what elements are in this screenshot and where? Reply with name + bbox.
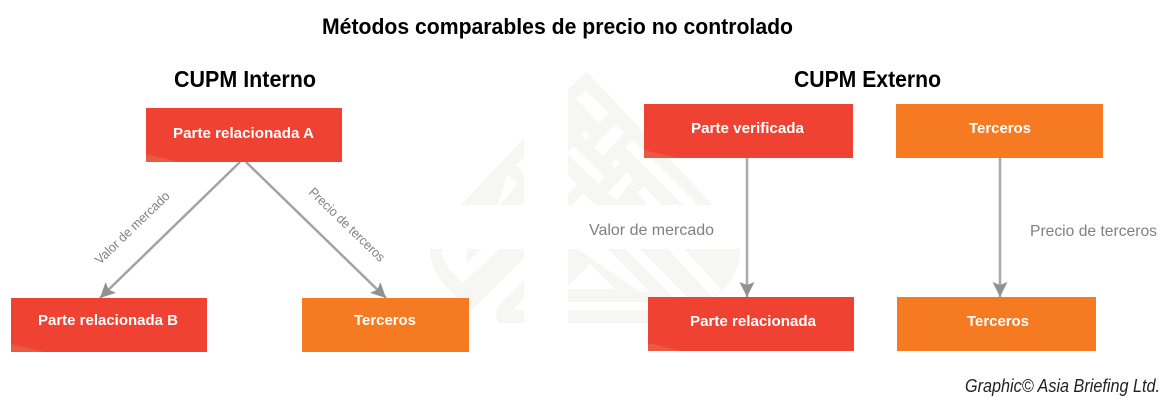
box: Parte relacionada <box>648 297 854 351</box>
panel: CUPM Interno <box>11 66 469 352</box>
box: Terceros top <box>896 104 1103 158</box>
box: Terceros bottom: Terceros <box>967 313 1029 330</box>
box: Terceros <box>302 298 469 352</box>
box: Parte relacionada B <box>11 298 207 352</box>
credit: Graphic© Asia Briefing Ltd. <box>965 376 1160 396</box>
box: Terceros: Terceros <box>354 312 416 329</box>
label: Valor de mercado: Valor de mercado <box>92 188 173 267</box>
arrow: to Parte relacionada B <box>100 162 240 298</box>
box: Terceros top: Terceros <box>969 120 1031 137</box>
box: Parte relacionada A <box>146 108 342 162</box>
heading: CUPM Interno: CUPM Interno <box>174 66 316 92</box>
box: Parte verificada: Parte verificada <box>691 120 805 137</box>
box: Parte verificada <box>644 104 853 158</box>
heading: CUPM Externo: CUPM Externo <box>794 66 941 92</box>
panel: CUPM Externo <box>589 66 1157 351</box>
background watermark <box>430 72 740 323</box>
box: Parte relacionada: Parte relacionada <box>690 313 817 330</box>
label: Valor de mercado: Valor de mercado <box>589 222 714 239</box>
box: Parte relacionada B: Parte relacionada B <box>38 312 178 329</box>
box: Terceros bottom <box>897 297 1096 351</box>
arrow: Terceros to Terceros <box>999 158 1001 297</box>
label: Precio de terceros: Precio de terceros <box>1030 223 1157 240</box>
label: Precio de terceros: Precio de terceros <box>306 184 389 265</box>
arrow: to Terceros <box>246 162 386 298</box>
arrow: verificada to relacionada <box>746 158 748 297</box>
box: Parte relacionada A: Parte relacionada A <box>173 125 314 142</box>
title: Métodos comparables de precio no controlado <box>322 14 793 39</box>
